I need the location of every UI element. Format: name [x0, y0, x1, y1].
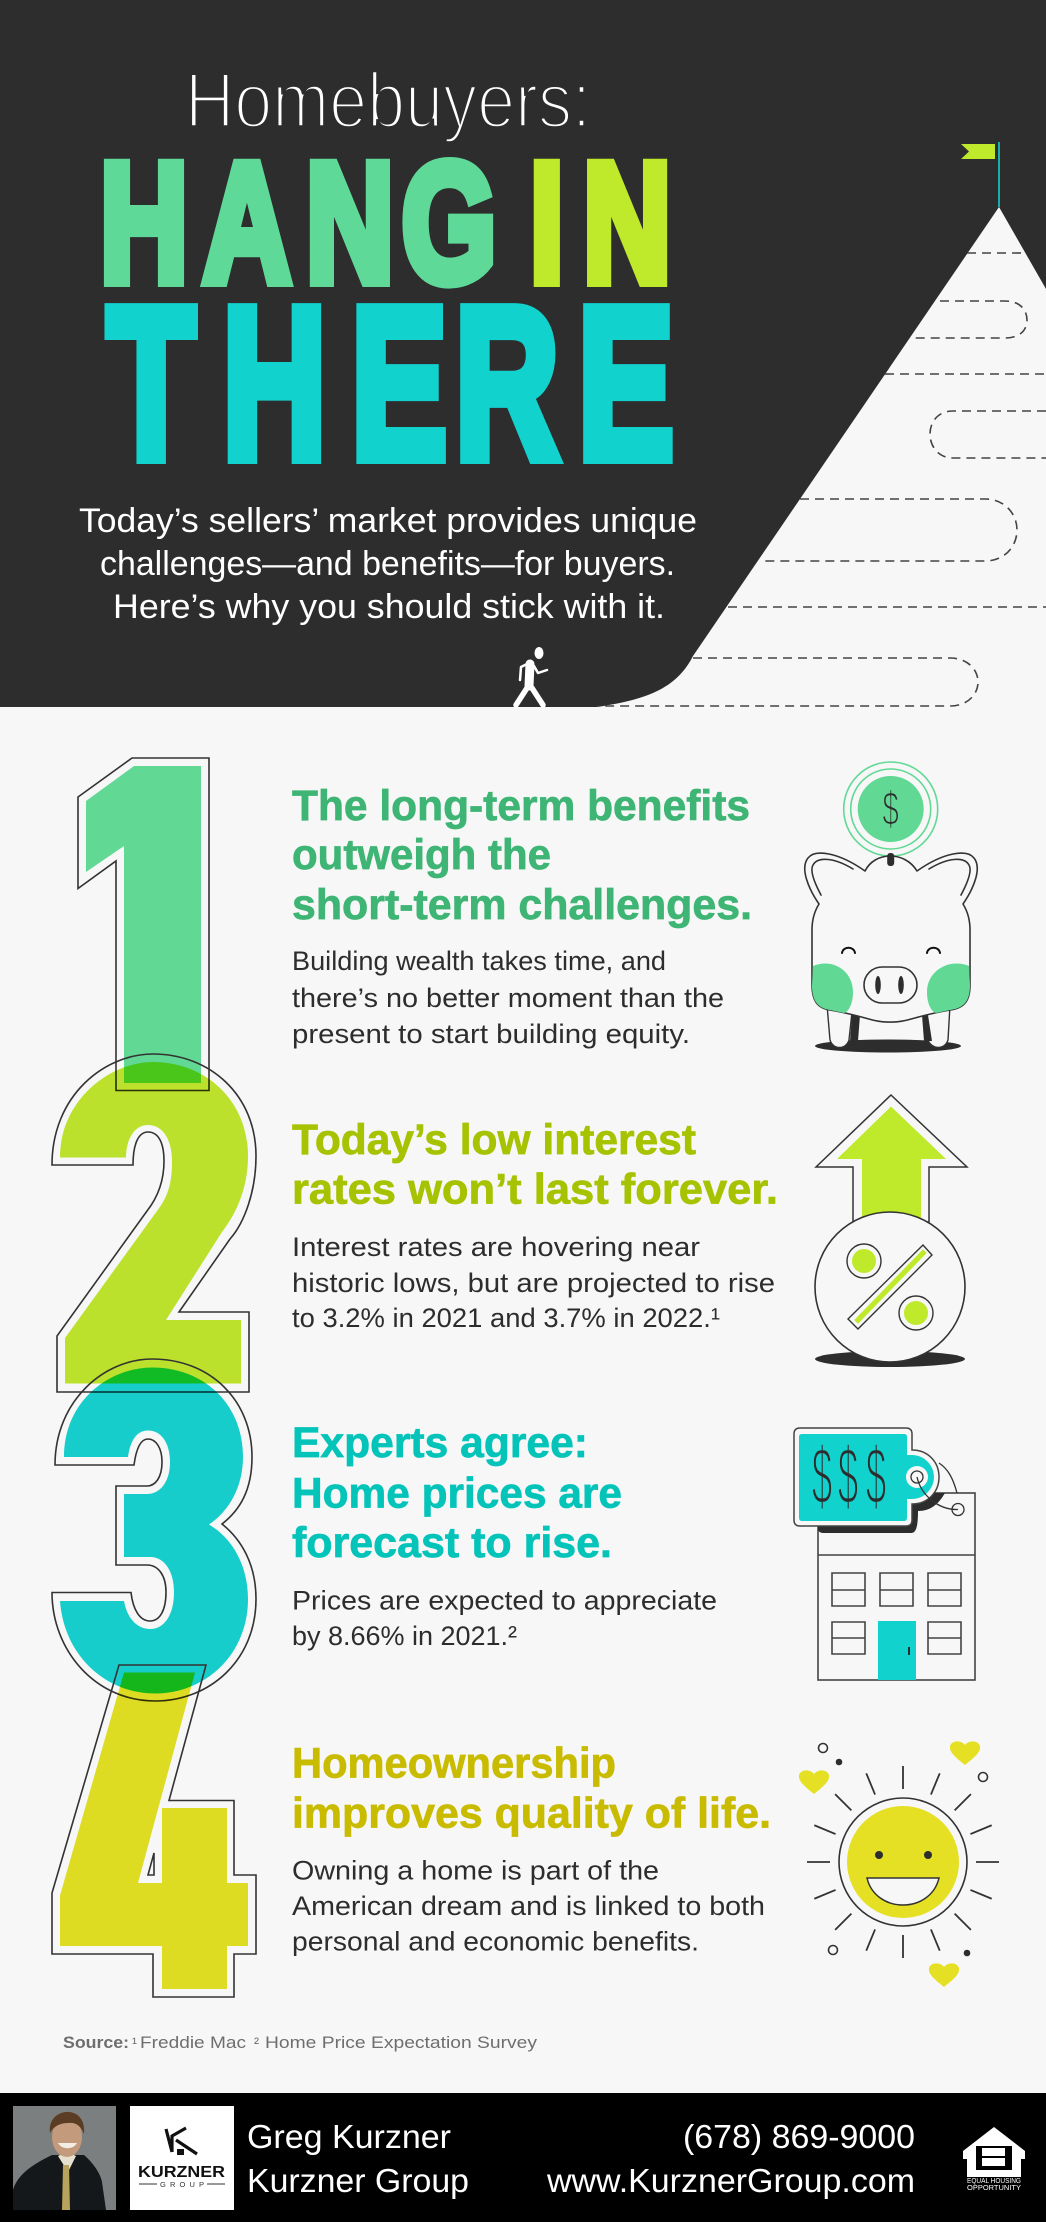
footer bar — [0, 2093, 1046, 2222]
body 1: Building wealth takes time, and — [292, 946, 666, 976]
icon: equal housing: EQUAL HOUSING — [967, 2178, 1021, 2185]
heading 1 — [292, 782, 752, 929]
body 2: historic lows, but are projected to rise — [292, 1268, 775, 1298]
header panel — [0, 0, 1046, 707]
title: HANG IN THERE: THERE — [107, 262, 674, 503]
heading 2 — [292, 1116, 778, 1214]
body 3 — [292, 1586, 717, 1651]
numeral 1 — [78, 758, 209, 1090]
source note — [63, 2034, 538, 2052]
source note: ² — [254, 2035, 259, 2052]
title: HANG IN THERE: HANG — [100, 130, 496, 318]
icon: walking person — [516, 647, 547, 705]
icon: rising arrow with percent — [815, 1095, 967, 1367]
mountain — [597, 207, 1046, 707]
icon: house with price tag: $ — [838, 1430, 858, 1522]
body 3: Prices are expected to appreciate — [292, 1586, 717, 1616]
contact details: www.KurznerGroup.com — [546, 2162, 915, 2199]
agency logo — [130, 2106, 234, 2210]
heading 2: Today’s low interest — [292, 1116, 696, 1164]
agency logo: GROUP — [160, 2180, 204, 2189]
contact details: (678) 869-9000 — [683, 2118, 915, 2155]
subtitle — [79, 502, 697, 626]
icon: piggy bank: $ — [882, 783, 899, 836]
heading 4 — [292, 1740, 771, 1838]
source note: Source: — [63, 2034, 129, 2052]
agent name — [247, 2118, 469, 2199]
body 4 — [292, 1856, 765, 1956]
heading 1: outweigh the — [292, 831, 551, 879]
section 1 text — [292, 782, 752, 1049]
title: HANG IN THERE: IN — [530, 130, 671, 318]
agent name: Greg Kurzner — [247, 2118, 451, 2155]
body 2 — [292, 1232, 775, 1333]
heading 1: The long-term benefits — [292, 782, 750, 830]
heading 2: rates won’t last forever. — [292, 1166, 778, 1214]
heading 3 — [292, 1419, 622, 1567]
heading 4: improves quality of life. — [292, 1790, 771, 1838]
source note: Freddie Mac — [140, 2034, 246, 2052]
title: Homebuyers: Homebuyers: — [185, 56, 591, 144]
heading 3: forecast to rise. — [292, 1519, 612, 1567]
numeral 2 — [52, 1054, 256, 1392]
icon: house with price tag: $ — [812, 1430, 832, 1522]
body 2: Interest rates are hovering near — [292, 1232, 700, 1262]
icon: house with price tag: $ — [866, 1430, 886, 1522]
section 4 text — [292, 1740, 771, 1956]
body 1 — [292, 946, 724, 1049]
numeral 4 — [52, 1665, 256, 1997]
heading 4: Homeownership — [292, 1740, 616, 1788]
body 3: by 8.66% in 2021.² — [292, 1621, 517, 1651]
icon: equal housing — [963, 2127, 1025, 2192]
agent name: Kurzner Group — [247, 2162, 469, 2199]
heading 1: short-term challenges. — [292, 881, 752, 929]
heading 3: Home prices are — [292, 1470, 622, 1518]
section 3 text — [292, 1419, 717, 1651]
subtitle: Here’s why you should stick with it. — [113, 588, 665, 626]
icon: equal housing: OPPORTUNITY — [967, 2185, 1021, 2192]
subtitle: Today’s sellers’ market provides unique — [79, 502, 697, 540]
contact details — [546, 2118, 915, 2199]
icon: piggy bank — [805, 762, 977, 1052]
title: HANG IN THERE — [100, 130, 674, 503]
section 2 text — [292, 1116, 778, 1333]
numeral 3 — [52, 1359, 256, 1701]
body 4: Owning a home is part of the — [292, 1856, 659, 1886]
icon: house with price tag — [794, 1428, 975, 1680]
icon: smiling sun — [799, 1741, 999, 1987]
agency logo: KURZNER — [138, 2164, 225, 2181]
body 1: there’s no better moment than the — [292, 983, 724, 1013]
flag — [961, 142, 1000, 207]
subtitle: challenges—and benefits—for buyers. — [100, 545, 675, 583]
body 2: to 3.2% in 2021 and 3.7% in 2022.¹ — [292, 1303, 720, 1333]
source note: Home Price Expectation Survey — [265, 2034, 538, 2052]
body 4: personal and economic benefits. — [292, 1926, 699, 1956]
dashed trail — [597, 253, 1046, 706]
body 4: American dream and is linked to both — [292, 1891, 765, 1921]
body 1: present to start building equity. — [292, 1019, 690, 1049]
source note: ¹ — [132, 2035, 137, 2052]
agent photo — [13, 2106, 116, 2210]
heading 3: Experts agree: — [292, 1419, 588, 1467]
